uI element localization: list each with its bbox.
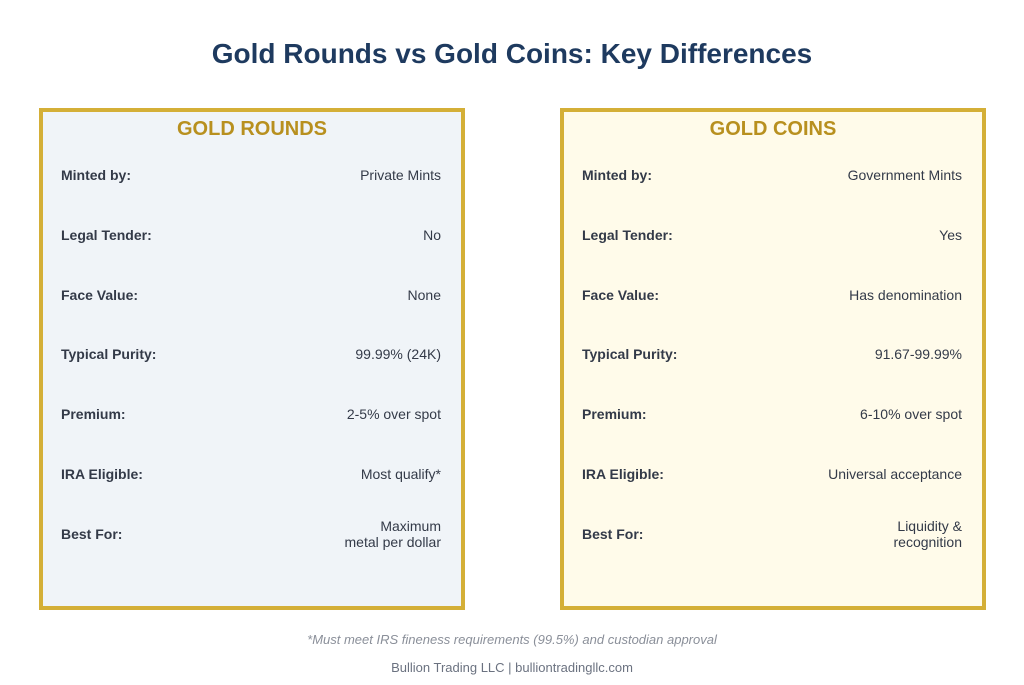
row: best for: Best For:: [61, 526, 122, 542]
row: ira: IRA Eligible:: [61, 466, 143, 482]
row: legal tender: [582, 227, 962, 243]
heading: gold coins: GOLD COINS: [710, 118, 836, 140]
row: best for: [582, 518, 962, 550]
row: minted by: [582, 167, 962, 183]
row: face value: None: [408, 287, 441, 303]
row: best for: [61, 518, 441, 550]
row: premium: Premium:: [582, 406, 647, 422]
row: purity: 91.67-99.99%: [875, 346, 962, 362]
footnote: *Must meet IRS fineness requirements (99.5%) and custodian approval: [307, 632, 717, 647]
row: purity: 99.99% (24K): [355, 346, 441, 362]
heading: gold rounds: GOLD ROUNDS: [177, 118, 327, 140]
row: legal tender: No: [423, 227, 441, 243]
row: face value: Face Value:: [582, 287, 659, 303]
row: best for: recognition: [894, 534, 962, 550]
row: purity: Typical Purity:: [582, 346, 677, 362]
row: legal tender: [61, 227, 441, 243]
panel: gold coins: [560, 108, 986, 610]
row: ira: IRA Eligible:: [582, 466, 664, 482]
row: legal tender: Yes: [939, 227, 962, 243]
row: premium: 2-5% over spot: [347, 406, 441, 422]
row: purity: [582, 346, 962, 362]
row: ira: Universal acceptance: [828, 466, 962, 482]
row: purity: [61, 346, 441, 362]
title: Gold Rounds vs Gold Coins: Key Differences: [212, 38, 812, 69]
row: face value: [61, 287, 441, 303]
row: best for: Best For:: [582, 526, 643, 542]
row: face value: Face Value:: [61, 287, 138, 303]
row: premium: Premium:: [61, 406, 126, 422]
panel: gold rounds: [39, 108, 465, 610]
footer: Bullion Trading LLC | bulliontradingllc.com: [391, 660, 633, 675]
row: premium: 6-10% over spot: [860, 406, 962, 422]
row: ira: [582, 466, 962, 482]
row: minted by: Private Mints: [360, 167, 441, 183]
row: best for: Maximum: [380, 518, 441, 534]
row: face value: Has denomination: [849, 287, 962, 303]
row: purity: Typical Purity:: [61, 346, 156, 362]
row: minted by: Minted by:: [61, 167, 131, 183]
row: best for: metal per dollar: [344, 534, 441, 550]
row: minted by: [61, 167, 441, 183]
row: ira: [61, 466, 441, 482]
row: minted by: Government Mints: [848, 167, 962, 183]
row: minted by: Minted by:: [582, 167, 652, 183]
row: premium: [582, 406, 962, 422]
row: face value: [582, 287, 962, 303]
row: premium: [61, 406, 441, 422]
row: ira: Most qualify*: [361, 466, 441, 482]
row: best for: Liquidity &: [897, 518, 962, 534]
row: legal tender: Legal Tender:: [582, 227, 673, 243]
row: legal tender: Legal Tender:: [61, 227, 152, 243]
